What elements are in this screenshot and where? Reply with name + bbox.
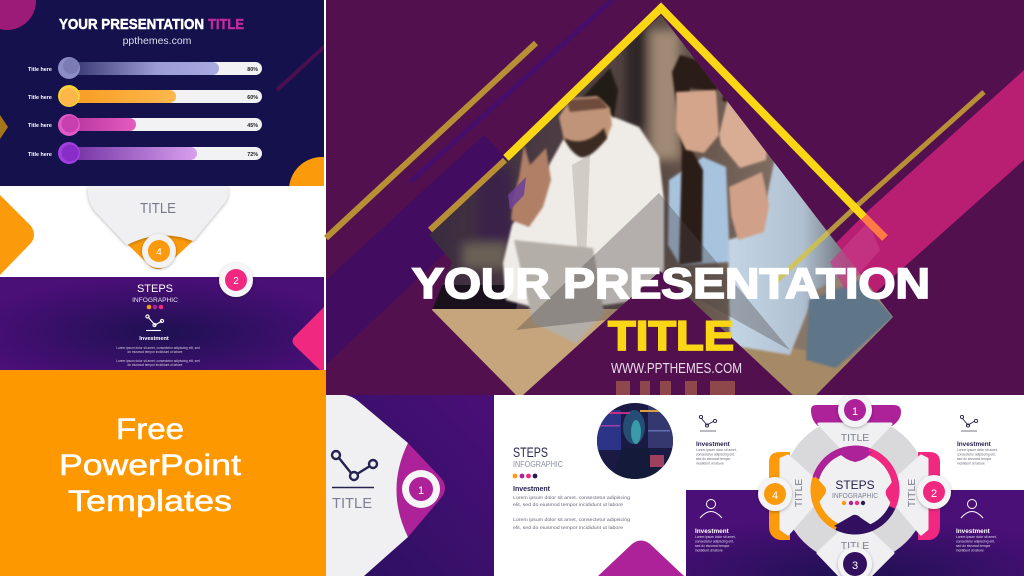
panel: steps infographic text slide [494, 395, 686, 576]
badge 1 [838, 393, 872, 427]
body text: Lorem ipsum dolor sit amet, consectetur adipiscing [513, 495, 631, 500]
grey ring backing [782, 417, 928, 563]
bar 72 percent: Title here [28, 152, 52, 158]
info block: bottom right: sed do eiusmod tempor [956, 544, 991, 548]
body text: Lorem ipsum dolor sit amet, consectetur adipiscing elit, sed [116, 359, 200, 363]
bar 60 percent: Title here [28, 95, 52, 101]
body text: Lorem ipsum dolor sit amet, consectetur adipiscing [513, 517, 631, 522]
arrow: left grey [781, 456, 826, 534]
badge 3: 3 [852, 560, 858, 572]
badge 2 [917, 475, 951, 509]
yellow title word: TITLE [608, 312, 734, 359]
info block: bottom right: Lorem ipsum dolor sit amet, [956, 535, 997, 539]
info block: top left: Investment [696, 441, 731, 448]
infographic subheading: INFOGRAPHIC [513, 460, 563, 469]
woman two hands [729, 172, 769, 240]
badge 1: 1 [418, 485, 424, 497]
info block: bottom right [956, 500, 997, 552]
blue sleeve [806, 280, 893, 368]
panel: free templates banner [0, 370, 326, 576]
badge 4: 4 [156, 247, 162, 258]
gold stripe inner [430, 160, 505, 230]
band: right pink [918, 452, 940, 540]
panel: free templates banner: PowerPoint [59, 449, 242, 482]
bar 72 percent: 72% [247, 152, 258, 158]
info block: bottom left: consectetur adipiscing elit, [695, 540, 734, 544]
badge 2: 2 [233, 276, 239, 287]
photo: three colleagues [425, 0, 900, 395]
slide heading: YOUR PRESENTATION [59, 17, 204, 33]
right title: TITLE [906, 479, 918, 507]
woman one shirt [668, 157, 730, 265]
panel: step one slide [326, 395, 494, 576]
info block: bottom left: sed do eiusmod tempor [695, 544, 730, 548]
woman two face [719, 94, 769, 168]
info block: bottom left [695, 500, 736, 552]
table [432, 309, 620, 395]
info block: top right: Investment [957, 441, 992, 448]
yellow frame [506, 8, 864, 217]
info block: top right: incididunt ut labore [957, 462, 985, 466]
colour dots [513, 474, 537, 478]
pink diamond [292, 307, 324, 370]
woman two shirt [728, 158, 852, 355]
title reflection [616, 381, 735, 395]
tab title: TITLE [140, 200, 176, 217]
info block: bottom left: Lorem ipsum dolor sit amet, [695, 535, 736, 539]
ring segments [814, 449, 896, 531]
main title: YOUR PRESENTATION [412, 260, 930, 308]
thin dark stripe [410, 0, 612, 182]
colour dots [147, 305, 163, 309]
band: top magenta [811, 405, 901, 426]
panel: step four and investment slide [0, 186, 324, 370]
orange diamond [0, 195, 34, 275]
panel: progress bars slide [0, 0, 324, 186]
top title: TITLE [841, 432, 869, 444]
info block: bottom right: consectetur adipiscing elit, [956, 540, 995, 544]
badge 2 [219, 263, 253, 297]
info block: top right: Lorem ipsum dolor sit amet, [957, 448, 998, 452]
centre disc [815, 450, 895, 530]
woman one face [676, 90, 719, 153]
icon: investment chart [146, 315, 164, 330]
info block: top right: consectetur adipiscing elit, [957, 452, 996, 456]
bottom title: TITLE [841, 540, 869, 552]
investment label: Investment [139, 336, 169, 342]
bar 45 percent: Title here [28, 123, 52, 129]
badge 3 [838, 547, 872, 576]
info block: top left: incididunt ut labore [696, 462, 724, 466]
panel: circular steps infographic [686, 393, 1024, 576]
orange wedge [126, 235, 194, 269]
body text [513, 495, 631, 530]
magenta triangle [598, 540, 684, 576]
decorative circles [0, 0, 324, 186]
infographic subheading: INFOGRAPHIC [132, 297, 178, 304]
info block: top left: sed do eiusmod tempor [696, 457, 731, 461]
ring notches [815, 452, 895, 531]
left title: TITLE [793, 479, 805, 507]
badge 2: 2 [931, 488, 937, 500]
gold stripe left [326, 43, 536, 238]
centre subheading: INFOGRAPHIC [832, 493, 878, 500]
bar 80 percent [28, 57, 262, 79]
man's hair [582, 68, 619, 119]
gold stripe right [860, 92, 984, 203]
info block: top left [696, 415, 737, 466]
badge 4 [142, 234, 176, 268]
man's hand [511, 145, 551, 227]
info block: top right: sed do eiusmod tempor [957, 457, 992, 461]
panel: free templates banner: Free [116, 413, 184, 446]
bar 80 percent: 80% [247, 67, 258, 73]
bar 45 percent: 45% [247, 123, 258, 129]
steps heading: STEPS [513, 444, 548, 460]
dark table edge [432, 285, 520, 312]
slide heading accent: TITLE [208, 17, 244, 33]
panel: free templates banner: Templates [68, 485, 232, 518]
arrow: bottom grey [818, 518, 893, 576]
round photo [597, 403, 673, 480]
badge 4: 4 [772, 490, 778, 502]
wide dark diagonal band [326, 135, 526, 365]
steps heading: STEPS [137, 283, 173, 295]
bar 80 percent: Title here [28, 67, 52, 73]
translucent grey diamond [516, 193, 790, 350]
info block: bottom left: Investment [695, 528, 730, 535]
band: left orange [769, 452, 790, 540]
arrow: right grey [884, 456, 927, 534]
info block: bottom right: Investment [956, 528, 991, 535]
grey arrow body [326, 395, 408, 576]
bar 60 percent [28, 85, 262, 107]
website: WWW.PPTHEMES.COM [611, 361, 742, 377]
magenta arrow tip [396, 443, 445, 537]
body text: do eiusmod tempor incididunt ut labore [128, 363, 183, 367]
badge 1 [402, 470, 440, 508]
body text: do eiusmod tempor incididunt ut labore [128, 350, 183, 354]
info block: top left: consectetur adipiscing elit, [696, 452, 735, 456]
info block: top left: Lorem ipsum dolor sit amet, [696, 448, 737, 452]
panel: main presentation slide [326, 0, 1024, 395]
body text: Lorem ipsum dolor sit amet, consectetur adipiscing elit, sed [116, 346, 200, 350]
centre dots [842, 501, 865, 505]
laptop [514, 240, 604, 343]
woman one hair [672, 55, 722, 265]
man's head [558, 94, 614, 144]
info block: bottom left: incididunt ut labore [695, 548, 723, 552]
title label: TITLE [332, 495, 372, 512]
bar 60 percent: 60% [247, 95, 258, 101]
body text: elit, sed do eiusmod tempor incididunt ut labore [513, 525, 624, 530]
body text [116, 346, 200, 367]
badge 1: 1 [852, 406, 858, 418]
body text: elit, sed do eiusmod tempor incididunt ut labore [513, 502, 624, 507]
info block: bottom right: incididunt ut labore [956, 548, 984, 552]
woman two hair [721, 95, 729, 104]
grey title tab [88, 186, 228, 245]
man's beard [564, 128, 607, 157]
bar 45 percent [28, 114, 262, 136]
slide subtitle: ppthemes.com [123, 35, 192, 47]
man's shirt [503, 115, 664, 307]
investment label: Investment [513, 486, 551, 493]
bar 72 percent [28, 142, 262, 164]
icon: chart [332, 451, 377, 488]
arrow: top grey [819, 424, 891, 462]
magenta diagonal band [816, 70, 1024, 310]
info block: top right [957, 415, 998, 466]
centre heading: STEPS [835, 478, 875, 492]
badge 4 [758, 477, 792, 511]
